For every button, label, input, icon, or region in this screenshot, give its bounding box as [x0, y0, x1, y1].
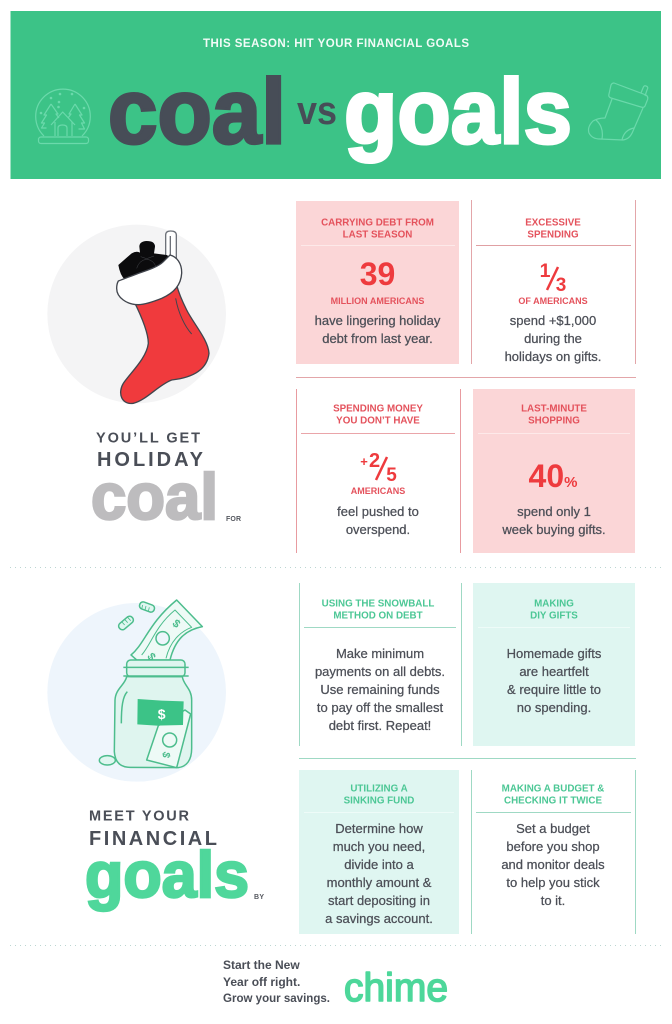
- card: sinking fund: monthly amount &: [327, 875, 432, 890]
- card: budget: [472, 770, 636, 934]
- card: carrying debt: have lingering holiday: [315, 313, 441, 328]
- card: carrying debt: [296, 201, 459, 364]
- headline: coal: coal: [108, 61, 286, 163]
- card: DIY gifts: [473, 583, 635, 746]
- card: budget: to it.: [541, 893, 565, 908]
- goals illustration: money jar in circle: $: [159, 750, 172, 759]
- card: snowball method: [300, 583, 462, 746]
- card: budget: CHECKING IT TWICE: [504, 796, 602, 806]
- goals illustration: money jar in circle: $: [170, 617, 183, 631]
- card: excessive spending: during the: [524, 331, 582, 346]
- card: sinking fund: SINKING FUND: [344, 796, 414, 806]
- chime logo: chime: [344, 966, 448, 1010]
- card: snowball method: Use remaining funds: [320, 682, 440, 697]
- card: carrying debt: LAST SEASON: [343, 230, 412, 240]
- fraction: one third: [540, 260, 566, 296]
- card: snowball method: to pay off the smallest: [317, 700, 443, 715]
- card: excessive spending: [472, 200, 636, 364]
- icon: outline stocking: [588, 83, 648, 140]
- header banner: [10, 11, 661, 179]
- goals section heading: [85, 808, 264, 911]
- header tagline: THIS SEASON: HIT YOUR FINANCIAL GOALS: [203, 38, 469, 50]
- fraction: two fifths: [360, 450, 397, 486]
- card: DIY gifts: no spending.: [517, 700, 591, 715]
- card: DIY gifts: & require little to: [507, 682, 601, 697]
- fraction: two fifths: 2: [369, 450, 380, 472]
- card: DIY gifts: are heartfelt: [519, 664, 589, 679]
- card: DIY gifts: MAKING: [534, 598, 574, 610]
- card: sinking fund: divide into a: [344, 857, 414, 872]
- coins: [139, 601, 155, 613]
- word: by: BY: [254, 894, 264, 901]
- footer tagline: Grow your savings.: [223, 991, 330, 1005]
- card: last-minute shopping: week buying gifts.: [501, 522, 606, 537]
- card: spending money you don't have: overspend.: [346, 522, 410, 537]
- card: sinking fund: start depositing in: [328, 893, 430, 908]
- card: sinking fund: [299, 770, 459, 934]
- line: financial: FINANCIAL: [89, 828, 217, 850]
- jar body: [114, 677, 192, 768]
- card: sinking fund: much you need,: [333, 839, 425, 854]
- word: coal: coal: [91, 460, 218, 533]
- coal section heading: [91, 430, 241, 533]
- card: excessive spending: EXCESSIVE: [525, 218, 581, 228]
- jar label: [137, 699, 184, 726]
- coal lumps: [118, 241, 171, 280]
- card: last-minute shopping: spend only 1: [517, 504, 591, 519]
- card: snowball method: METHOD ON DEBT: [333, 610, 423, 622]
- card: spending money you don't have: AMERICANS: [351, 486, 405, 496]
- hanger loop: [166, 231, 176, 260]
- card: snowball method: Make minimum: [336, 646, 424, 661]
- stocking cuff: [117, 255, 182, 305]
- coal illustration: stocking in circle: [47, 225, 226, 403]
- word: for: FOR: [226, 516, 241, 523]
- card: sinking fund: UTILIZING A: [350, 784, 408, 794]
- card: budget: Set a budget: [516, 821, 590, 836]
- card: spending money you don't have: [296, 389, 460, 553]
- card: sinking fund: Determine how: [335, 821, 423, 836]
- card: excessive spending: SPENDING: [527, 230, 579, 240]
- card: spending money you don't have: feel pushed to: [337, 504, 419, 519]
- card: snowball method: debt first. Repeat!: [329, 718, 431, 733]
- card: carrying debt: debt from last year.: [322, 331, 433, 346]
- headline: goals: goals: [344, 61, 572, 163]
- goals illustration: money jar in circle: $: [158, 706, 166, 722]
- footer tagline: Year off right.: [223, 975, 300, 989]
- card: carrying debt: MILLION AMERICANS: [331, 296, 424, 306]
- card: excessive spending: OF AMERICANS: [518, 296, 588, 306]
- card: sinking fund: a savings account.: [325, 911, 433, 926]
- card: budget: before you shop: [506, 839, 600, 854]
- goals illustration: money jar in circle: $: [144, 651, 158, 664]
- card: excessive spending: spend +$1,000: [510, 313, 596, 328]
- card: last-minute shopping: [473, 389, 635, 553]
- line: you'll get: YOU’LL GET: [96, 430, 200, 446]
- card: last-minute shopping: LAST-MINUTE: [521, 404, 587, 414]
- headline: vs: vs: [297, 89, 337, 133]
- fraction: one third: 3: [556, 275, 566, 296]
- stocking foot: [121, 285, 209, 403]
- word: goals: goals: [85, 838, 249, 911]
- card: budget: MAKING A BUDGET &: [502, 784, 604, 794]
- card: snowball method: USING THE SNOWBALL: [322, 598, 434, 610]
- card: snowball method: payments on all debts.: [315, 664, 445, 679]
- footer tagline: Start the New: [223, 958, 300, 972]
- card: spending money you don't have: YOU DON’T HAVE: [336, 416, 420, 426]
- footer tagline: [223, 958, 330, 1005]
- fraction: two fifths: 5: [386, 465, 397, 486]
- line: meet your: MEET YOUR: [89, 808, 190, 824]
- stat: 40 percent: 40%: [529, 458, 577, 494]
- goals illustration: money jar in circle: [47, 600, 226, 782]
- fraction: one third: 1: [540, 260, 551, 282]
- card: carrying debt: 39: [360, 256, 395, 292]
- bill inside jar: [147, 710, 191, 768]
- card: spending money you don't have: SPENDING MONEY: [333, 404, 423, 414]
- card: DIY gifts: Homemade gifts: [507, 646, 602, 661]
- card: budget: and monitor deals: [501, 857, 605, 872]
- card: carrying debt: CARRYING DEBT FROM: [321, 218, 434, 228]
- fraction: two fifths: +: [360, 454, 368, 469]
- card: excessive spending: holidays on gifts.: [505, 349, 601, 364]
- card: DIY gifts: DIY GIFTS: [530, 610, 578, 622]
- icon: snow globe: [36, 89, 90, 144]
- card: last-minute shopping: SHOPPING: [528, 416, 580, 426]
- card: budget: to help you stick: [506, 875, 600, 890]
- line: holiday: HOLIDAY: [97, 449, 204, 471]
- bill leaving jar: [131, 600, 202, 660]
